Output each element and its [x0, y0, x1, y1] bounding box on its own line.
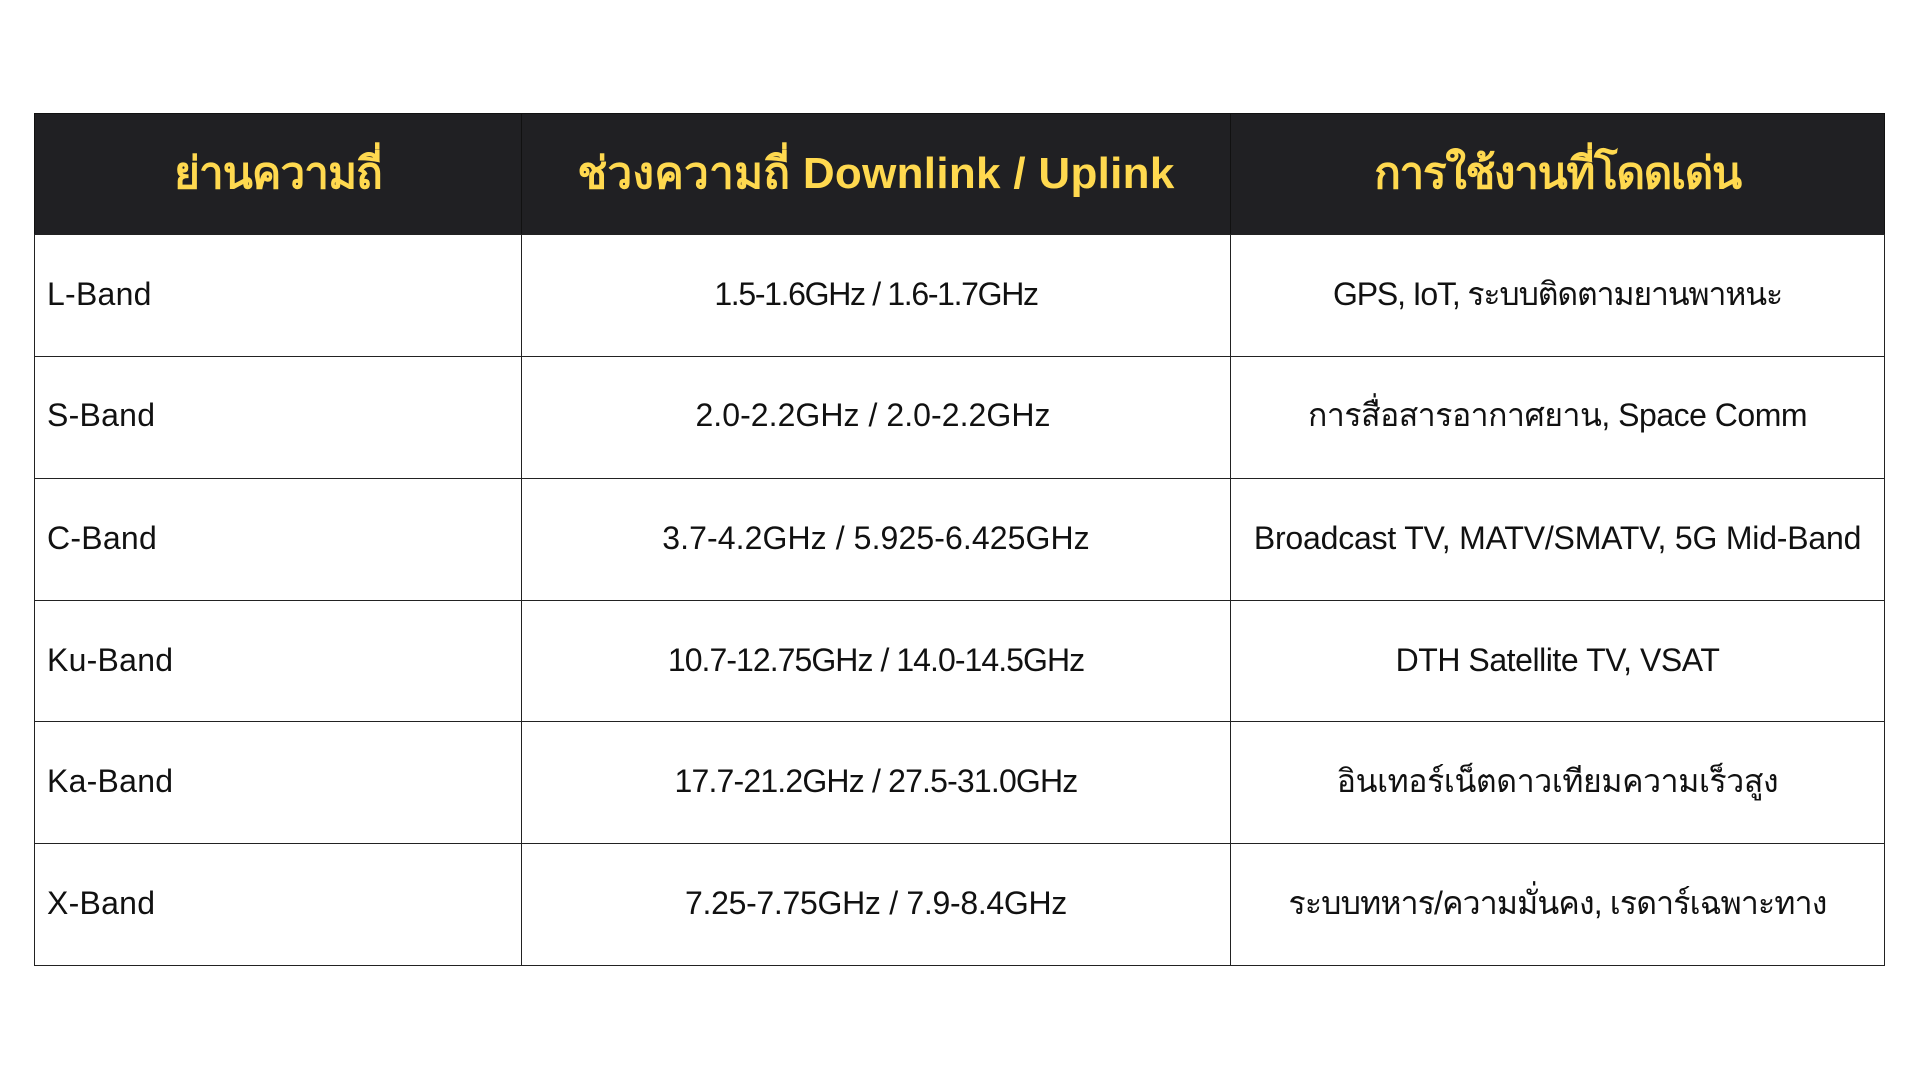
- header: downlink / uplink range: ช่วงความถี่ Downlink / Uplink: [577, 149, 1175, 198]
- row label: Ku-Band: Ku-Band: [47, 642, 173, 678]
- Ka-Band range: [521, 721, 1231, 844]
- Ka-Band uses: อินเทอร์เน็ตดาวเทียมความเร็วสูง: [1337, 763, 1778, 799]
- row label: S-Band: [34, 356, 522, 479]
- header: notable uses: [1230, 113, 1885, 235]
- Ku-Band uses: DTH Satellite TV, VSAT: [1396, 642, 1719, 678]
- X-Band uses: ระบบทหาร/ความมั่นคง, เรดาร์เฉพาะทาง: [1288, 885, 1826, 921]
- row label: Ka-Band: Ka-Band: [47, 763, 173, 799]
- row label: C-Band: C-Band: [47, 520, 157, 556]
- row label: S-Band: S-Band: [47, 397, 155, 433]
- S-Band range: [521, 356, 1231, 479]
- row label: Ku-Band: [34, 600, 522, 722]
- L-Band range: [521, 234, 1231, 357]
- row label: L-Band: [34, 234, 522, 357]
- header: frequency band: ย่านความถี่: [174, 149, 382, 198]
- C-Band range: 3.7-4.2GHz / 5.925-6.425GHz: [662, 520, 1090, 556]
- table: satellite frequency bands: [34, 113, 1885, 966]
- L-Band range: 1.5-1.6GHz / 1.6-1.7GHz: [714, 276, 1038, 312]
- row label: X-Band: X-Band: [47, 885, 155, 921]
- Ka-Band uses: [1230, 721, 1885, 844]
- S-Band uses: [1230, 356, 1885, 479]
- header: frequency band: [34, 113, 522, 235]
- row label: Ka-Band: [34, 721, 522, 844]
- Ku-Band uses: [1230, 600, 1885, 722]
- row label: X-Band: [34, 843, 522, 966]
- X-Band range: [521, 843, 1231, 966]
- C-Band uses: [1230, 478, 1885, 601]
- C-Band range: [521, 478, 1231, 601]
- Ka-Band range: 17.7-21.2GHz / 27.5-31.0GHz: [674, 763, 1077, 799]
- Ku-Band range: 10.7-12.75GHz / 14.0-14.5GHz: [668, 642, 1084, 678]
- row label: L-Band: L-Band: [47, 276, 152, 312]
- X-Band uses: [1230, 843, 1885, 966]
- S-Band uses: การสื่อสารอากาศยาน, Space Comm: [1308, 397, 1807, 433]
- Ku-Band range: [521, 600, 1231, 722]
- L-Band uses: [1230, 234, 1885, 357]
- header: downlink / uplink range: [521, 113, 1231, 235]
- header: notable uses: การใช้งานที่โดดเด่น: [1374, 149, 1741, 198]
- row label: C-Band: [34, 478, 522, 601]
- X-Band range: 7.25-7.75GHz / 7.9-8.4GHz: [685, 885, 1067, 921]
- L-Band uses: GPS, IoT, ระบบติดตามยานพาหนะ: [1333, 276, 1782, 312]
- S-Band range: 2.0-2.2GHz / 2.0-2.2GHz: [695, 397, 1051, 433]
- C-Band uses: Broadcast TV, MATV/SMATV, 5G Mid-Band: [1254, 520, 1861, 556]
